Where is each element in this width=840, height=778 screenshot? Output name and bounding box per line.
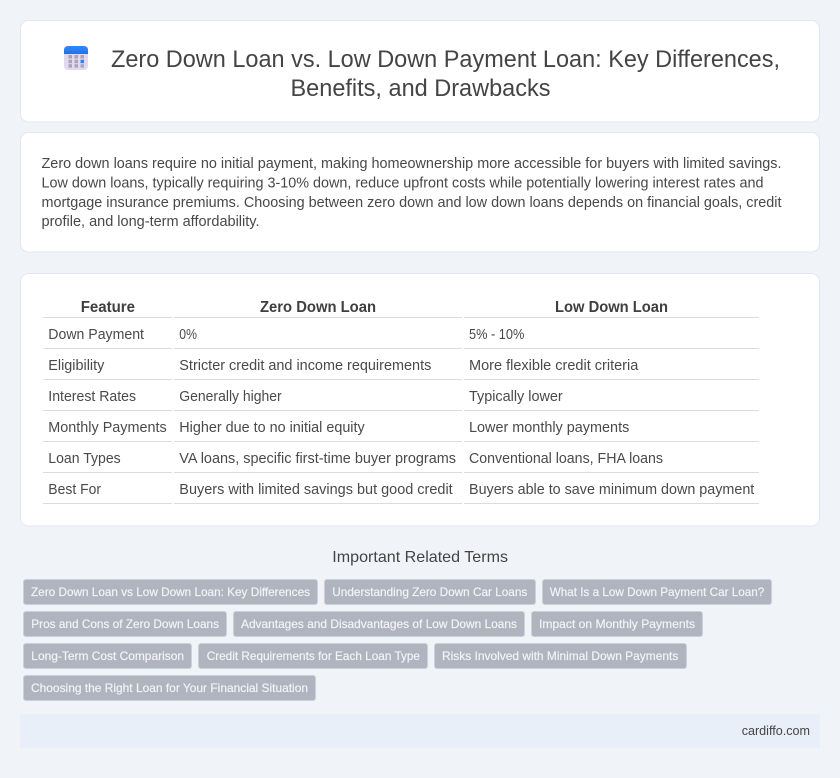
table row: loan types: Loan Types <box>48 451 121 467</box>
table header <box>81 299 668 316</box>
panel: title card <box>20 20 820 122</box>
table row: eligibility: More flexible credit criteria <box>469 358 638 374</box>
table row: down payment <box>48 327 524 343</box>
table row: monthly payments: Higher due to no initial equity <box>179 420 365 436</box>
table row: down payment: 0% <box>179 327 197 343</box>
footer brand: cardiffo.com <box>742 723 810 738</box>
summary text: profile, and long-term affordability. <box>42 214 260 230</box>
table row: interest rates: Typically lower <box>469 389 563 405</box>
table row: best for: Best For <box>48 482 101 498</box>
tag: Impact on Monthly Payments <box>539 617 695 631</box>
table row: monthly payments: Monthly Payments <box>48 420 167 436</box>
tag <box>24 580 318 604</box>
table row: monthly payments: Lower monthly payments <box>469 420 629 436</box>
table row: interest rates: Interest Rates <box>48 389 136 405</box>
table row: down payment: 5% - 10% <box>469 327 524 343</box>
table row: down payment: Down Payment <box>48 327 144 343</box>
summary text <box>42 156 782 230</box>
tag <box>324 580 536 604</box>
table row: interest rates: Generally higher <box>179 389 282 405</box>
table row: monthly payments <box>48 420 629 436</box>
table row: loan types: Conventional loans, FHA loans <box>469 451 663 467</box>
table row: best for: Buyers with limited savings but good credit <box>179 482 453 498</box>
tag: What Is a Low Down Payment Car Loan? <box>550 585 765 599</box>
title <box>111 46 780 102</box>
heading: important related terms: Important Related Terms <box>332 549 508 566</box>
tag: Understanding Zero Down Car Loans <box>332 585 527 599</box>
tag: Zero Down Loan vs Low Down Loan: Key Differences <box>31 585 310 599</box>
tag: Choosing the Right Loan for Your Financial Situation <box>31 681 308 695</box>
table row: eligibility: Eligibility <box>48 358 105 374</box>
table header: Low Down Loan <box>555 299 668 316</box>
footer <box>20 714 820 748</box>
table row: loan types <box>48 451 663 467</box>
table row: eligibility <box>48 358 638 374</box>
panel: summary card <box>20 132 820 252</box>
table row: interest rates <box>48 389 563 405</box>
tag <box>24 644 192 668</box>
table row: best for: Buyers able to save minimum down payment <box>469 482 754 498</box>
tag: Pros and Cons of Zero Down Loans <box>31 617 219 631</box>
tag: Advantages and Disadvantages of Low Down Loans <box>241 617 517 631</box>
related terms tags <box>24 580 772 700</box>
table row: eligibility: Stricter credit and income requirements <box>179 358 431 374</box>
tag <box>434 644 686 668</box>
summary text: mortgage insurance premiums. Choosing between zero down and low down loans depends on financial goals, credit <box>42 195 782 211</box>
tag <box>24 676 316 700</box>
tag <box>532 612 702 636</box>
tag: Long-Term Cost Comparison <box>31 649 184 663</box>
table row: best for <box>48 482 754 498</box>
table row: loan types: VA loans, specific first-time buyer programs <box>179 451 456 467</box>
summary text: Low down loans, typically requiring 3-10% down, reduce upfront costs while potentially lowering interest rates and <box>42 176 764 192</box>
icon: calendar <box>64 46 88 70</box>
tag <box>198 644 428 668</box>
tag: Risks Involved with Minimal Down Payments <box>442 649 678 663</box>
tag <box>234 612 524 636</box>
tag: Credit Requirements for Each Loan Type <box>207 649 420 663</box>
title: Zero Down Loan vs. Low Down Payment Loan: Key Differences, <box>111 46 780 73</box>
summary text: Zero down loans require no initial payment, making homeownership more accessible for buyers with limited savings. <box>42 156 781 172</box>
title: Benefits, and Drawbacks <box>290 75 550 102</box>
tag <box>24 612 226 636</box>
panel: comparison table card <box>20 274 820 526</box>
tag <box>542 580 772 604</box>
table header: Feature <box>81 299 135 316</box>
table header: Zero Down Loan <box>260 299 376 316</box>
